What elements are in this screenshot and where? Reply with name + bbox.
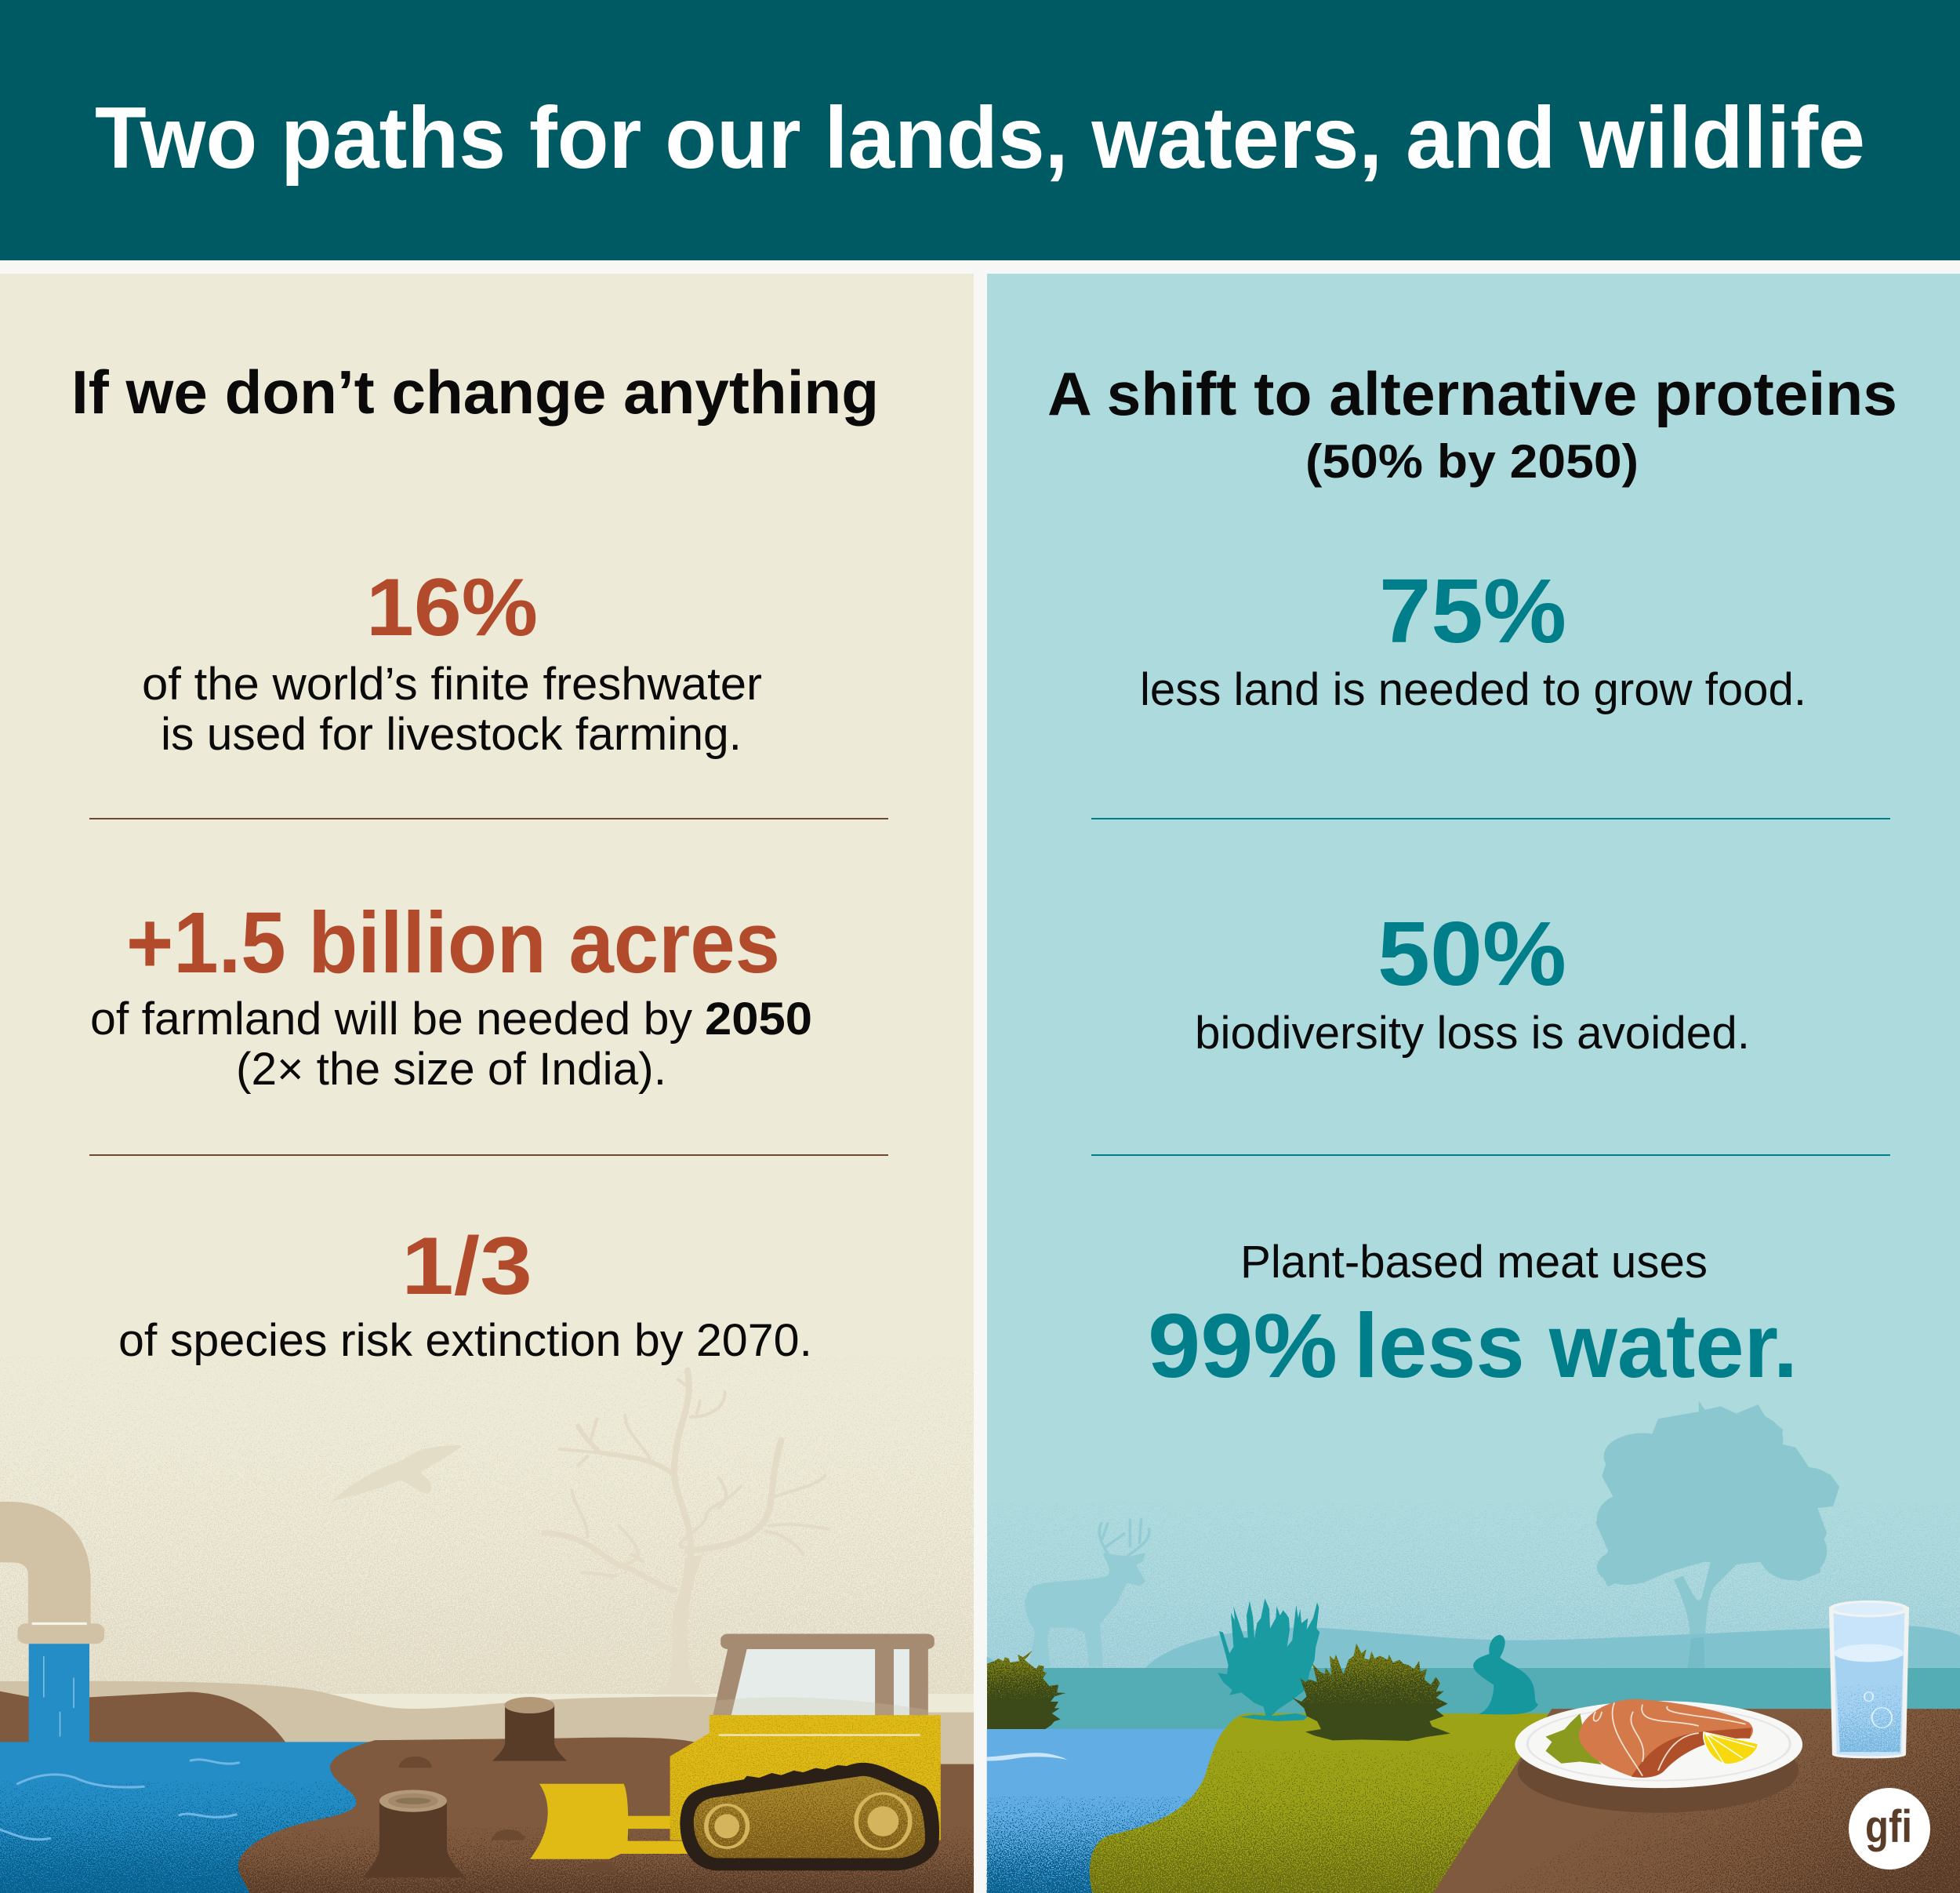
stat: +1.5 billion acres: of farmland will be needed by bbox=[90, 994, 692, 1045]
icon: deer silhouette bbox=[1025, 1518, 1149, 1667]
waterfall from pipe bbox=[29, 1644, 89, 1744]
icon: plate with salmon, lemon and garnish bbox=[1515, 1699, 1802, 1813]
icon: rabbit bbox=[1473, 1635, 1538, 1714]
ground (left) bbox=[238, 1738, 974, 1893]
stat: 50% biodiversity: 50% bbox=[1377, 903, 1566, 1005]
icon: dead tree silhouette bbox=[544, 1371, 828, 1695]
icon: back tree stump bbox=[492, 1697, 567, 1761]
stat: 99% less water: Plant-based meat uses bbox=[1240, 1237, 1708, 1288]
stat: 99% less water: 99% bbox=[1148, 1295, 1338, 1397]
icon: bulldozer bbox=[530, 1633, 941, 1870]
brown mound bbox=[0, 1691, 286, 1743]
water wave highlight bbox=[987, 1753, 1068, 1761]
icon: center dark shrub bbox=[1292, 1644, 1450, 1741]
heading: right column: A shift to alternative proteins bbox=[1047, 359, 1897, 428]
left sky haze bbox=[0, 1333, 974, 1694]
stat: +1.5 billion acres: (2× the size of India). bbox=[236, 1044, 666, 1095]
small mounds bbox=[399, 1757, 617, 1873]
subheading: (50% by 2050) bbox=[1305, 435, 1639, 488]
stat: 16% freshwater: is used for livestock farming. bbox=[161, 709, 742, 760]
panel: shift to alternative proteins (background) bbox=[987, 274, 1960, 1893]
stat: 75% less land bbox=[1140, 560, 1806, 715]
stat: 75% less land: less land is needed to grow food. bbox=[1140, 664, 1806, 715]
water: right lake bbox=[987, 1729, 1230, 1893]
stat: 99% less water: less water. bbox=[1354, 1295, 1798, 1397]
stat: +1.5 billion acres: 2050 bbox=[705, 994, 812, 1045]
icon: left dark shrub bbox=[987, 1651, 1065, 1729]
green land bbox=[1090, 1713, 1580, 1893]
icon: front tree stump bbox=[362, 1789, 466, 1877]
heading: left column: If we don’t change anything bbox=[71, 358, 879, 427]
stat: 1/3 of species: 1/3 bbox=[401, 1221, 532, 1312]
stat: 1/3 of species: of species risk extinction by 2070. bbox=[118, 1315, 812, 1366]
logo: gfi: gfi bbox=[1865, 1801, 1912, 1852]
icon: water pipe bbox=[0, 1502, 104, 1644]
back hill (right) bbox=[987, 1626, 1960, 1668]
teal distant band bbox=[987, 1668, 1960, 1730]
stat: 16% freshwater bbox=[142, 562, 762, 760]
stat: +1.5 billion acres: +1.5 billion acres bbox=[126, 895, 780, 991]
right sky haze bbox=[987, 1490, 1960, 1678]
icon: tree silhouette bbox=[1595, 1401, 1839, 1668]
logo: gfi bbox=[1849, 1788, 1930, 1869]
heading: right column bbox=[1047, 359, 1897, 488]
panel: if we don't change anything (background) bbox=[0, 274, 974, 1893]
table / brown earth bbox=[1433, 1709, 1960, 1893]
stat: 16% freshwater: 16% bbox=[366, 562, 538, 653]
header banner bbox=[0, 0, 1960, 260]
stat: 1/3 of species bbox=[118, 1221, 812, 1366]
stat: +1.5 billion acres bbox=[90, 895, 812, 1095]
icon: glass of water bbox=[1831, 1601, 1907, 1757]
stat: 16% freshwater: of the world’s finite freshwater bbox=[142, 659, 762, 710]
icon: teal shrub bbox=[1218, 1598, 1319, 1721]
back hill (left) bbox=[0, 1681, 974, 1779]
icon: bird silhouette bbox=[332, 1445, 463, 1502]
stat: 50% biodiversity bbox=[1195, 903, 1750, 1059]
title: Two paths for our lands, waters, and wildlife bbox=[95, 89, 1865, 187]
water ripples bbox=[0, 1760, 239, 1840]
stat: 75% less land: 75% bbox=[1379, 560, 1566, 662]
water: left lake bbox=[0, 1742, 375, 1893]
stat: 50% biodiversity: biodiversity loss is avoided. bbox=[1195, 1008, 1750, 1059]
stat: 99% less water bbox=[1148, 1237, 1798, 1397]
